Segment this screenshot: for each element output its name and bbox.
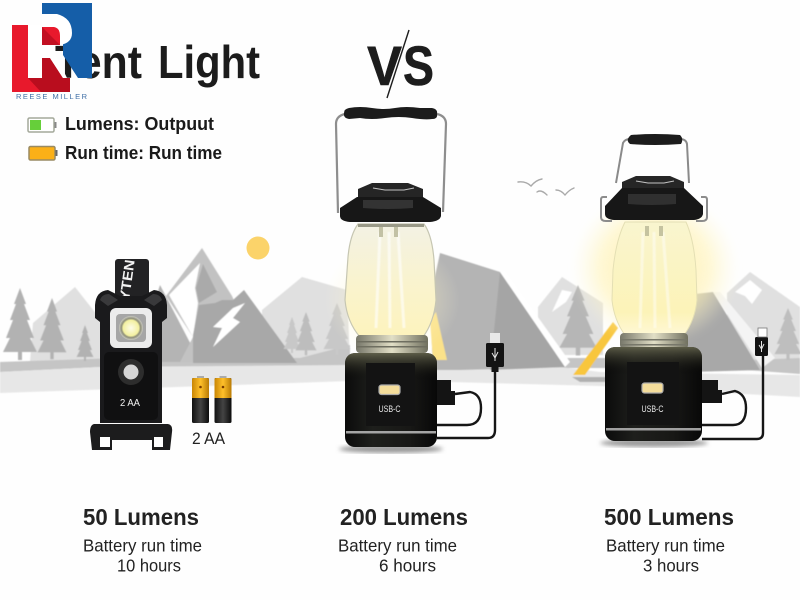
- headlamp strap: YTEN: [116, 259, 138, 301]
- stats: 500 lumens: Battery run time: [606, 536, 725, 556]
- legend label: lumens: Lumens: Outpuut: [65, 114, 214, 134]
- ground band: [0, 345, 800, 397]
- icon: orange battery: [29, 146, 58, 160]
- snow on distant mountains: [552, 280, 762, 312]
- lantern base: [605, 347, 702, 441]
- icon: two AA batteries: [192, 376, 232, 423]
- main mountains: [135, 248, 297, 363]
- icon: green battery: [28, 118, 56, 132]
- legend: [28, 114, 222, 163]
- lantern glass: [612, 222, 697, 335]
- lantern hood: [601, 176, 707, 221]
- stats: 200 lumens: 200 Lumens: [340, 504, 468, 530]
- lantern glow: [571, 190, 739, 346]
- birds: [518, 179, 574, 195]
- stats: 200 lumens: Battery run time: [338, 536, 457, 556]
- lantern hood: [340, 183, 441, 222]
- legend label: run time: Run time: Run time: [65, 143, 222, 163]
- lantern grip: [628, 134, 682, 145]
- headlamp body: [95, 290, 167, 423]
- sun: [246, 236, 270, 260]
- lantern shadow: [600, 439, 708, 447]
- stats: 200 lumens: [338, 504, 468, 576]
- stats: 50 lumens: Battery run time: [83, 536, 202, 556]
- background: mountain camp scene: [0, 248, 800, 397]
- headlamp small light: [118, 359, 144, 385]
- batteries label: 2 AA: [192, 430, 225, 448]
- stats: 500 lumens: [604, 504, 734, 576]
- title: [55, 36, 260, 88]
- stats: 50 lumens: 10 hours: [117, 556, 181, 576]
- tent right: [572, 292, 775, 382]
- stats: 50 lumens: 50 Lumens: [83, 504, 199, 530]
- headlamp strap: [115, 259, 149, 301]
- VS heading: [367, 30, 434, 98]
- lantern usb cable: [702, 328, 768, 439]
- lantern collar: [620, 333, 688, 349]
- lantern wire handle: [336, 114, 446, 213]
- title: Tent: [55, 36, 142, 88]
- lantern base: [345, 353, 437, 447]
- product: 200 lumen lantern: [324, 107, 504, 453]
- lantern usb-c label: USB-C: [642, 404, 664, 415]
- VS heading: V: [367, 34, 402, 97]
- lantern wire handle: [616, 139, 689, 183]
- lantern collar: [356, 335, 428, 353]
- lantern glass: [345, 224, 436, 337]
- lantern grip: [344, 107, 437, 119]
- distant pale mountains: [30, 272, 800, 362]
- lantern usb-c port light: [379, 385, 400, 394]
- stats: 50 lumens: [83, 504, 202, 576]
- VS heading: S: [403, 34, 434, 97]
- stats: 200 lumens: 6 hours: [379, 556, 436, 576]
- headlamp clip foot: [90, 424, 172, 450]
- stats: 500 lumens: 500 Lumens: [604, 504, 734, 530]
- headlamp battery label: 2 AA: [120, 397, 140, 409]
- title: Light: [158, 36, 260, 88]
- stats: 500 lumens: 3 hours: [643, 556, 699, 576]
- lantern usb-c port light: [642, 383, 663, 393]
- lantern shadow: [339, 445, 443, 453]
- product: headlamp: [90, 259, 172, 450]
- tent left: [430, 253, 570, 370]
- headlamp main light: [110, 308, 152, 348]
- pine trees: [3, 285, 800, 361]
- lantern glow: [324, 240, 460, 360]
- product: 500 lumen lantern: [571, 134, 768, 447]
- lantern usb cable: [437, 333, 504, 438]
- logo: Reese Miller: [12, 3, 92, 101]
- lantern usb-c label: USB-C: [378, 404, 401, 415]
- logo wordmark: REESE MILLER: [16, 92, 88, 101]
